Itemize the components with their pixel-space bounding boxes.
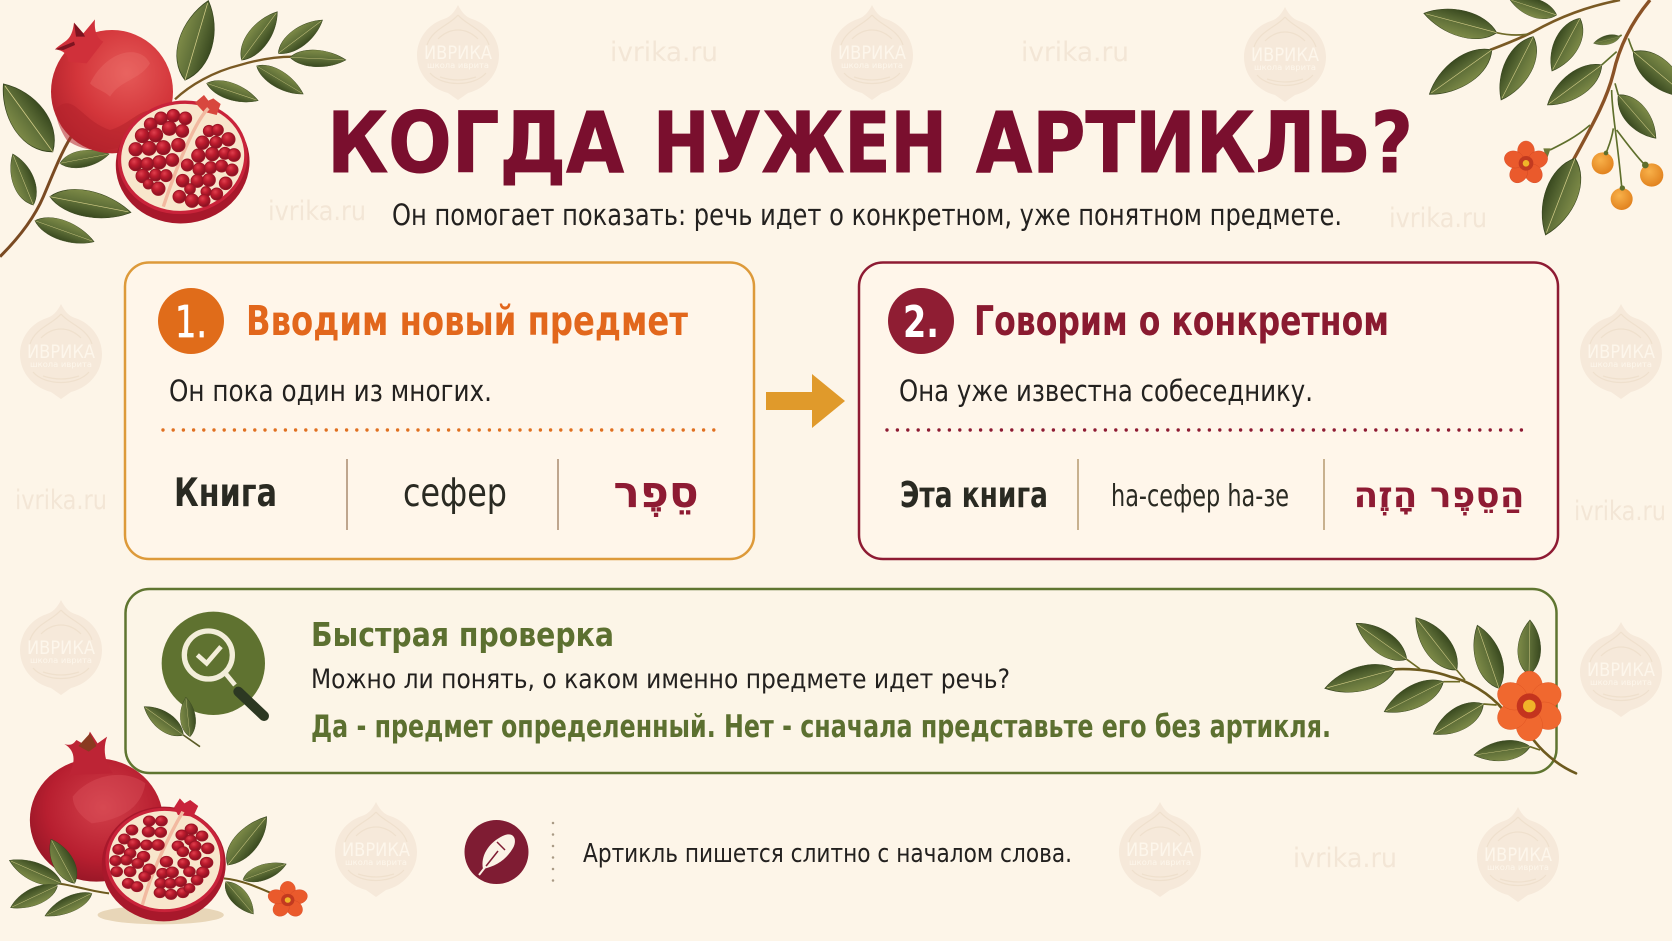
icon: magnifier with check bbox=[139, 612, 265, 747]
heading 2: Говорим о конкретном bbox=[974, 297, 1389, 345]
watermarks: ИВРИКА bbox=[342, 839, 410, 861]
watermarks: школа иврита bbox=[345, 858, 407, 867]
watermarks: школа иврита bbox=[30, 360, 92, 369]
icon: feather bbox=[464, 820, 528, 884]
watermarks: школа иврита bbox=[1590, 678, 1652, 687]
watermarks: ИВРИКА bbox=[1587, 659, 1655, 681]
heading 1: Вводим новый предмет bbox=[246, 297, 688, 345]
watermarks: ivrika.ru bbox=[610, 37, 718, 68]
title: АРТИКЛЬ? bbox=[976, 94, 1413, 192]
footnote: Артикль пишется слитно с началом слова. bbox=[583, 839, 1072, 869]
title: КОГДА bbox=[327, 94, 624, 192]
watermarks: ИВРИКА bbox=[1587, 341, 1655, 363]
phrase: hebrew: הַסֵפֶר הָזֶה bbox=[1354, 475, 1524, 516]
subtitle: Он помогает показать: речь идет о конкретном, уже понятном предмете. bbox=[392, 198, 1342, 232]
watermarks: ИВРИКА bbox=[27, 637, 95, 659]
watermarks: школа иврита bbox=[427, 61, 489, 70]
illustration: top-right branches with flower and berries bbox=[1420, 0, 1672, 241]
watermarks: ИВРИКА bbox=[27, 341, 95, 363]
number badge 1 bbox=[158, 288, 224, 354]
description 1: Он пока один из многих. bbox=[169, 374, 492, 408]
watermarks: школа иврита bbox=[1254, 63, 1316, 72]
check question: Можно ли понять, о каком именно предмете идет речь? bbox=[311, 664, 1010, 695]
watermarks: школа иврита bbox=[841, 61, 903, 70]
watermarks: школа иврита bbox=[1129, 858, 1191, 867]
title bbox=[327, 94, 1413, 192]
panel: quick check bbox=[126, 589, 1556, 773]
arrow bbox=[766, 374, 845, 428]
watermarks: школа иврита bbox=[1590, 360, 1652, 369]
illustration: top-left pomegranates bbox=[0, 0, 346, 257]
watermarks: ivrika.ru bbox=[15, 485, 107, 516]
watermarks: ИВРИКА bbox=[838, 42, 906, 64]
word: hebrew: סֵפֶר bbox=[613, 467, 699, 518]
watermarks: ivrika.ru bbox=[1389, 203, 1487, 234]
number badge 1: 1. bbox=[175, 297, 207, 348]
word: transliteration: сефер bbox=[403, 471, 507, 516]
phrase: transliteration: ha-сефер ha-зе bbox=[1111, 479, 1289, 514]
word: russian: Книга bbox=[174, 471, 277, 516]
watermarks: ИВРИКА bbox=[1251, 44, 1319, 66]
watermarks: ИВРИКА bbox=[424, 42, 492, 64]
watermarks: ИВРИКА bbox=[1484, 844, 1552, 866]
watermarks: школа иврита bbox=[1487, 863, 1549, 872]
description 2: Она уже известна собеседнику. bbox=[899, 374, 1313, 408]
number badge 2 bbox=[888, 288, 954, 354]
check heading: Быстрая проверка bbox=[311, 615, 614, 654]
watermarks: школа иврита bbox=[30, 656, 92, 665]
panel: specific object bbox=[859, 262, 1558, 559]
check answer: Да - предмет определенный. Нет - сначала представьте его без артикля. bbox=[311, 709, 1331, 745]
watermarks: ivrika.ru bbox=[1021, 37, 1129, 68]
watermarks: ИВРИКА bbox=[1126, 839, 1194, 861]
illustration: flower branch bbox=[1322, 610, 1576, 773]
illustration: bottom-left pomegranates bbox=[5, 732, 309, 924]
watermarks: ivrika.ru bbox=[1293, 843, 1397, 874]
title: НУЖЕН bbox=[653, 94, 947, 192]
watermarks: ivrika.ru bbox=[268, 196, 366, 227]
panel: new object bbox=[125, 262, 754, 559]
number badge 2: 2. bbox=[903, 297, 939, 348]
phrase: russian: Эта книга bbox=[900, 475, 1048, 516]
